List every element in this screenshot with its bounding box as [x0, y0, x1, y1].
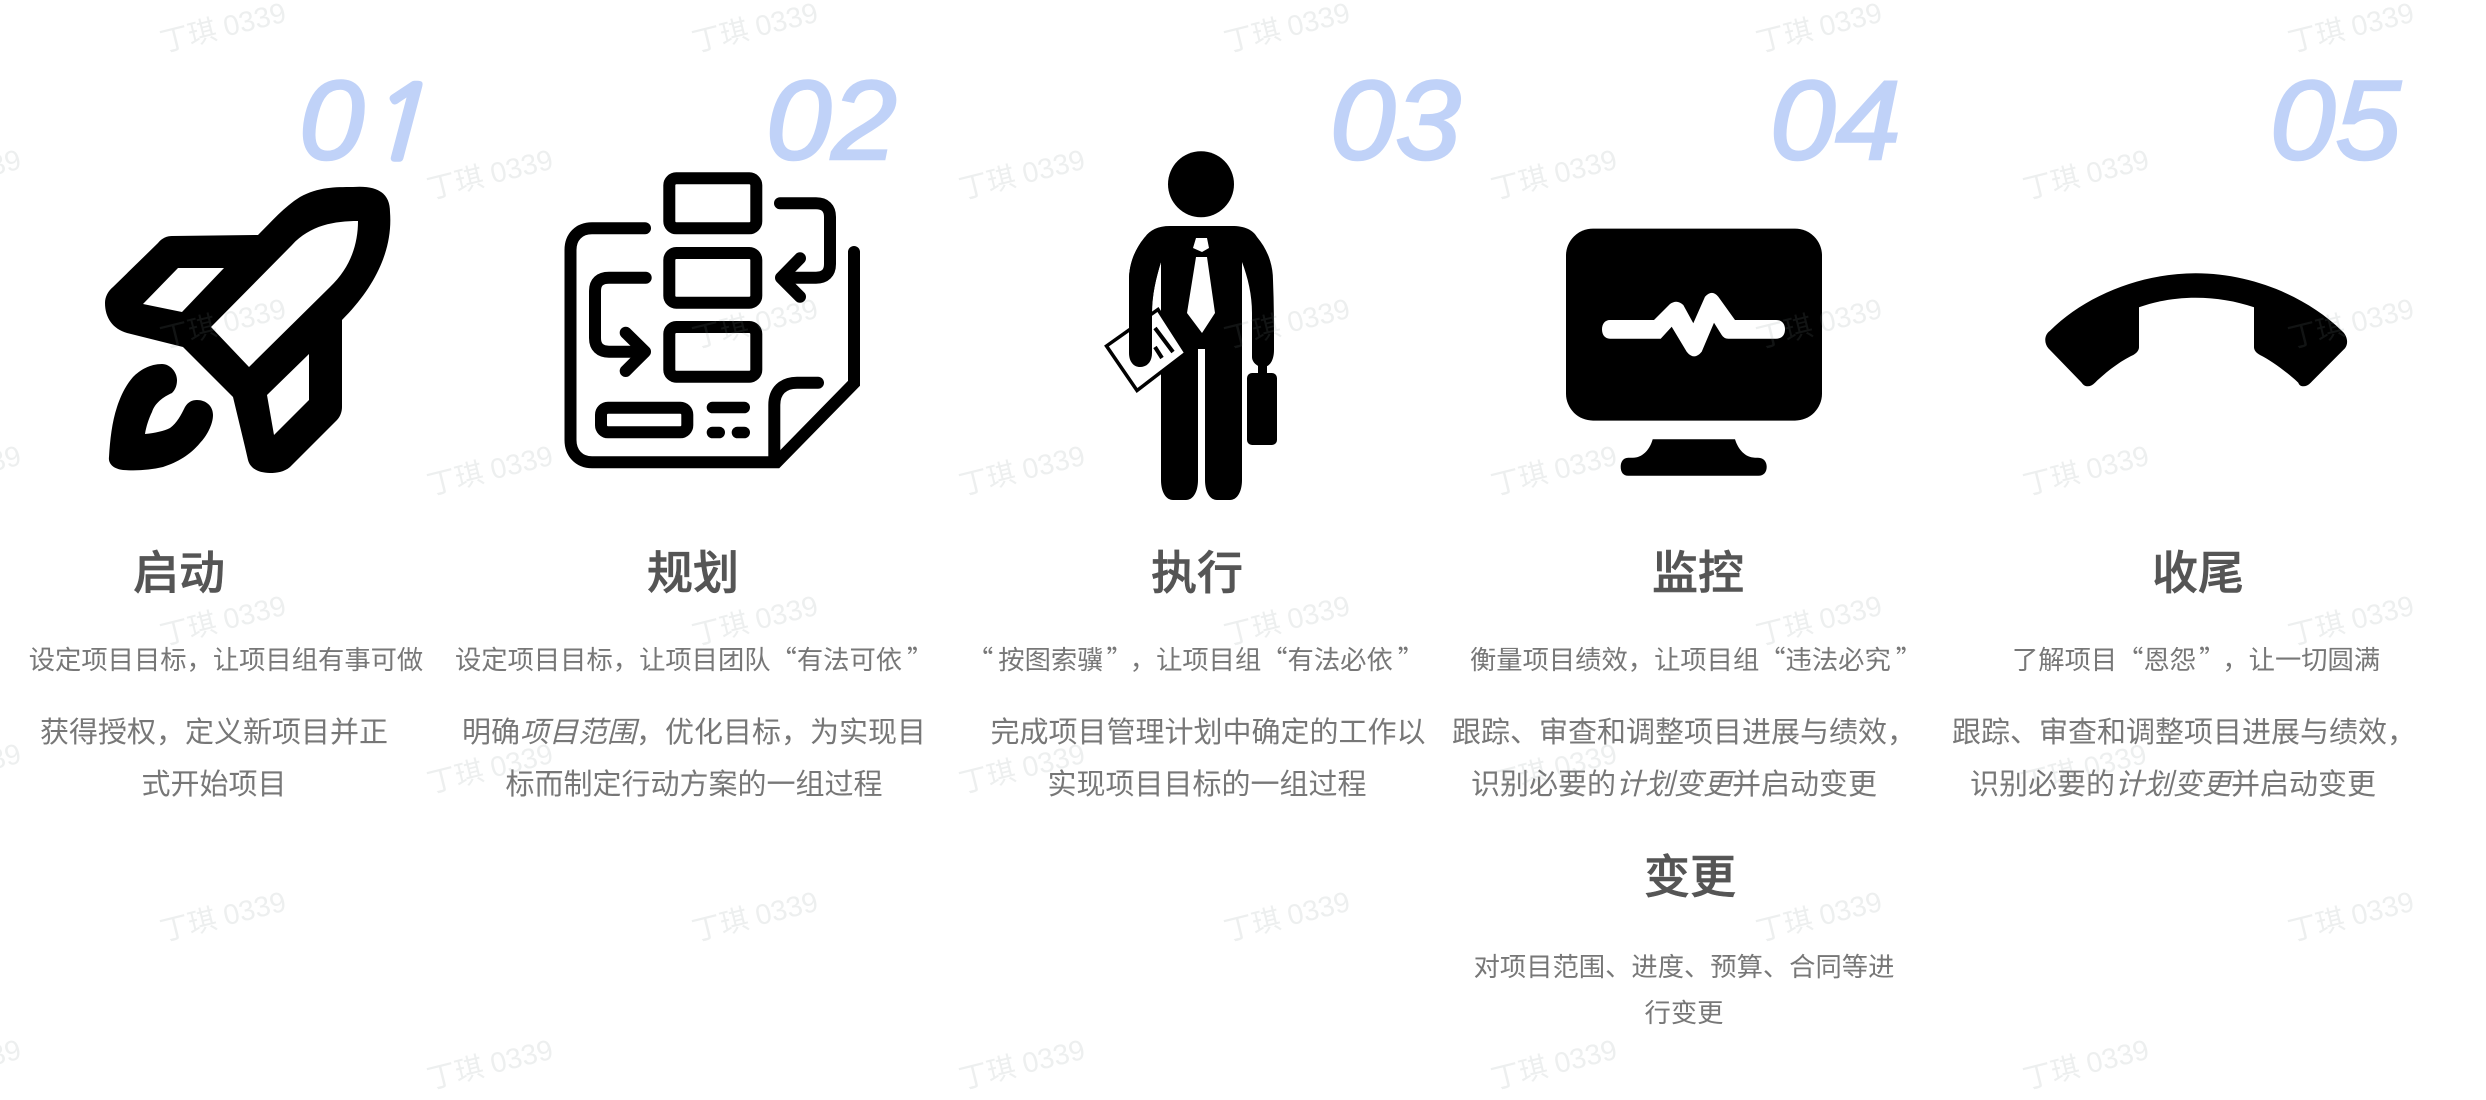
- watermark pattern: 丁琪 0339: [1488, 738, 1620, 800]
- panel: 启动: [29, 59, 426, 803]
- watermark pattern: 丁琪 0339: [1221, 293, 1353, 355]
- heading: 规划: 规划: [647, 537, 739, 603]
- icon: phone handset: [2045, 273, 2347, 386]
- watermark pattern: 丁琪 0339: [2020, 144, 2152, 206]
- description: 标而制定行动方案的一组过程: [505, 761, 883, 803]
- watermark pattern: 丁琪 0339: [2285, 886, 2417, 948]
- watermark pattern: 丁琪 0339: [2285, 293, 2417, 355]
- icon: rocket: [105, 187, 390, 473]
- watermark pattern: 丁琪 0339: [157, 293, 289, 355]
- watermark pattern: 丁琪 0339: [956, 1034, 1088, 1096]
- watermark pattern: 丁琪 0339: [689, 590, 821, 652]
- tagline: “按图索骥”，让项目组“有法必依”: [967, 638, 1424, 677]
- tagline: 了解项目“恩怨”，让一切圆满: [2012, 638, 2380, 677]
- watermark pattern: 丁琪 0339: [2020, 440, 2152, 502]
- watermark pattern: 丁琪 0339: [1488, 1034, 1620, 1096]
- watermark pattern: 丁琪 0339: [2285, 590, 2417, 652]
- watermark pattern: 丁琪 0339: [2018, 738, 2150, 800]
- watermark pattern: 丁琪 0339: [689, 293, 821, 355]
- watermark pattern: 丁琪 0339: [956, 144, 1088, 206]
- panel: 规划: [455, 59, 933, 803]
- watermark pattern: 丁琪 0339: [1753, 293, 1885, 355]
- watermark pattern: 丁琪 0339: [424, 440, 556, 502]
- watermark pattern: 丁琪 0339: [1753, 886, 1885, 948]
- description: 变更: 行变更: [1645, 991, 1723, 1030]
- watermark pattern: 丁琪 0339: [424, 144, 556, 206]
- number 05: 05: [2270, 59, 2402, 183]
- watermark pattern: 丁琪 0339: [424, 738, 556, 800]
- heading: 变更: 变更: [1644, 841, 1736, 907]
- description: 完成项目管理计划中确定的工作以: [990, 709, 1426, 751]
- description: 获得授权，定义新项目并正: [40, 709, 388, 751]
- tagline: 设定项目目标，让项目团队“有法可依”: [455, 638, 933, 677]
- description: 变更: [1474, 945, 1894, 1030]
- description: 明确项目范围，优化目标，为实现目: [462, 709, 926, 751]
- watermark pattern: 丁琪 0339: [1488, 144, 1620, 206]
- watermark pattern: 丁琪 0339: [689, 886, 821, 948]
- watermark pattern: 丁琪 0339: [2020, 1034, 2152, 1096]
- number 01: 1: [361, 72, 426, 175]
- watermark pattern: 丁琪 0339: [1221, 590, 1353, 652]
- tagline: 衡量项目绩效，让项目组“违法必究”: [1470, 638, 1922, 677]
- watermark pattern: 丁琪 0339: [424, 1034, 556, 1096]
- description: [1952, 709, 2416, 803]
- watermark pattern: 丁琪 0339: [157, 886, 289, 948]
- heading: 监控: 监控: [1652, 537, 1744, 603]
- heading: 执行: 执行: [1151, 537, 1243, 603]
- number 02: 02: [766, 59, 897, 183]
- watermark pattern: 丁琪 0339: [956, 440, 1088, 502]
- description: 跟踪、审查和调整项目进展与绩效，: [1452, 709, 1916, 751]
- icon: businessman with briefcase: [1106, 151, 1277, 500]
- description: 变更: 对项目范围、进度、预算、合同等进: [1474, 945, 1894, 984]
- heading: 启动: 启动: [133, 537, 225, 603]
- description: [462, 709, 926, 803]
- description: 跟踪、审查和调整项目进展与绩效，: [1952, 709, 2416, 751]
- watermark pattern: 丁琪 0339: [1488, 440, 1620, 502]
- watermark pattern: 丁琪 0339: [1221, 886, 1353, 948]
- number 03: 03: [1330, 59, 1461, 183]
- watermark pattern: 丁琪 0339: [956, 738, 1088, 800]
- watermark pattern: 丁琪 0339: [157, 590, 289, 652]
- heading: 收尾: 收尾: [2152, 537, 2244, 603]
- tagline: 设定项目目标，让项目组有事可做: [29, 638, 423, 677]
- description: 实现项目目标的一组过程: [1047, 761, 1367, 803]
- description: [990, 709, 1426, 803]
- description: [40, 709, 388, 803]
- number 04: 04: [1770, 59, 1901, 183]
- description: 识别必要的计划变更并启动变更: [1970, 761, 2376, 803]
- number 01: 0: [299, 59, 364, 183]
- description: 式开始项目: [141, 761, 287, 803]
- panel: 监控: [1452, 59, 1922, 1030]
- document under arm: [1106, 310, 1186, 390]
- icon: planning flowchart sheet: [570, 178, 854, 462]
- description: [1452, 709, 1916, 803]
- panel: 收尾: [1952, 59, 2416, 803]
- description: 识别必要的计划变更并启动变更: [1471, 761, 1877, 803]
- watermark pattern: 丁琪 0339: [1753, 590, 1885, 652]
- icon: monitor with pulse: [1566, 229, 1822, 476]
- panel: 执行: [967, 59, 1461, 803]
